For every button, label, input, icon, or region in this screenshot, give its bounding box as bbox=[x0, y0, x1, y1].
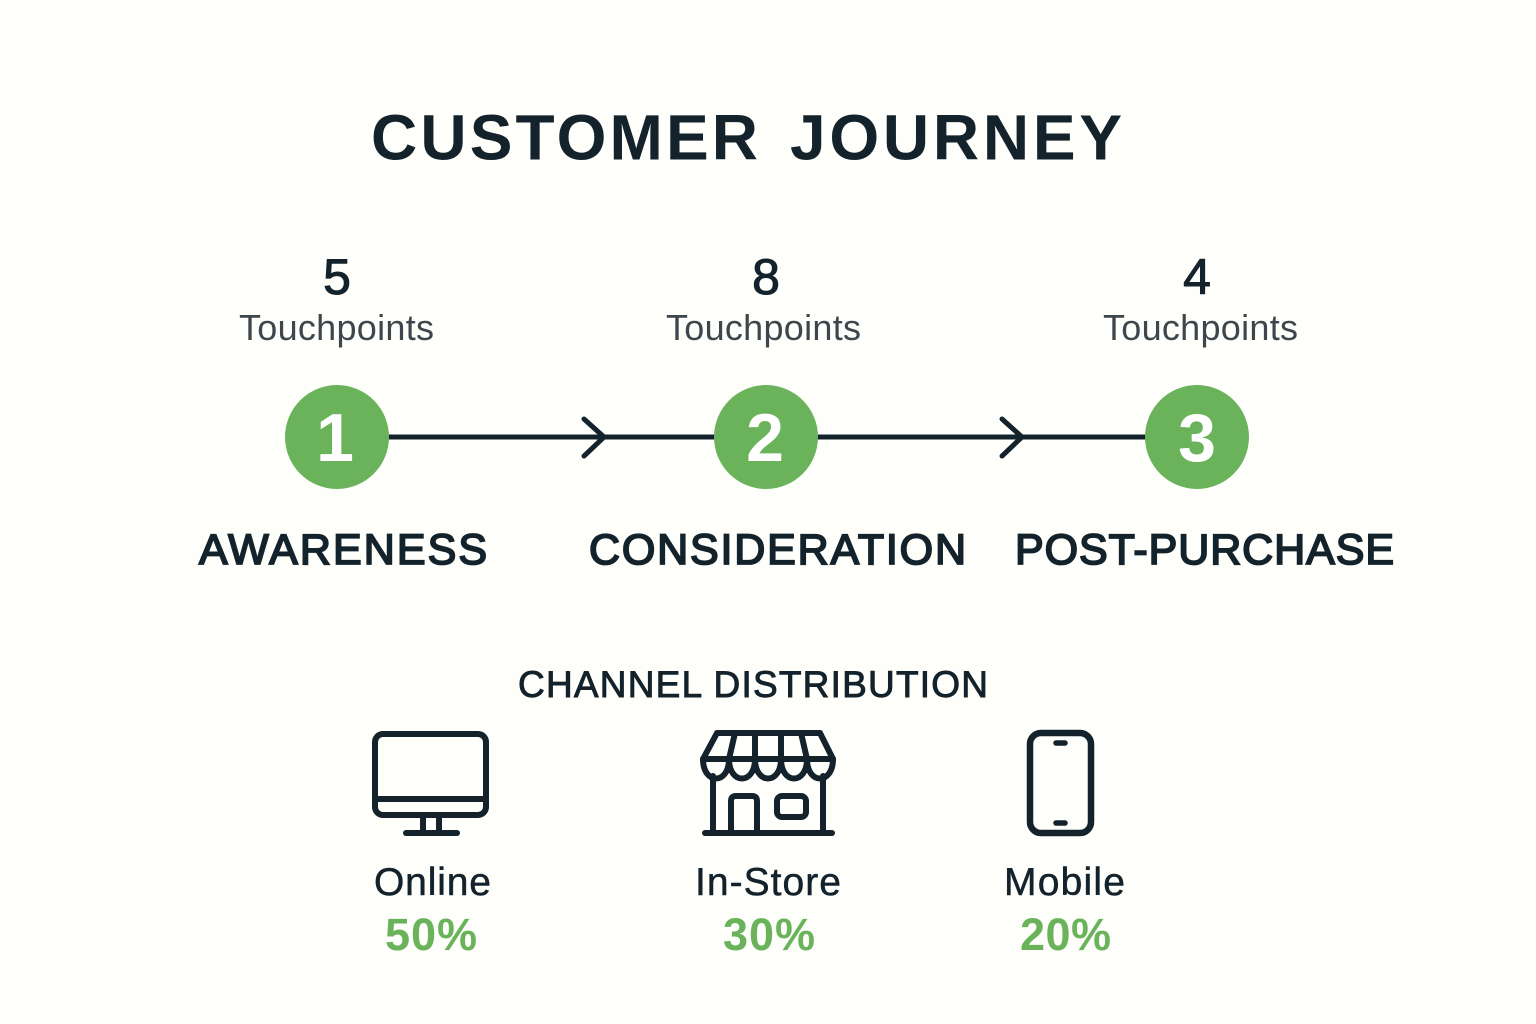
channel percentage: 50% bbox=[385, 909, 477, 960]
stage 2: consideration bbox=[589, 249, 966, 574]
step badge 3: 3 bbox=[1178, 400, 1216, 476]
icon: desktop monitor bbox=[375, 734, 486, 833]
step badge 3 bbox=[1145, 385, 1249, 489]
stage 1: awareness bbox=[199, 249, 487, 574]
touchpoints label: Touchpoints bbox=[239, 307, 434, 348]
touchpoints label: Touchpoints bbox=[1103, 307, 1298, 348]
touchpoints label: Touchpoints bbox=[666, 307, 861, 348]
channel: mobile bbox=[1004, 733, 1125, 960]
channel distribution heading: CHANNEL DISTRIBUTION bbox=[518, 664, 988, 705]
title: JOURNEY bbox=[790, 102, 1122, 174]
channel label: Online bbox=[374, 861, 491, 904]
icon: storefront bbox=[703, 733, 833, 833]
stage 3: post-purchase bbox=[1015, 249, 1394, 574]
channel label: In-Store bbox=[695, 861, 841, 904]
title: CUSTOMER bbox=[371, 102, 758, 174]
channel: in-store bbox=[695, 733, 841, 960]
channel percentage: 30% bbox=[723, 909, 815, 960]
step badge 2 bbox=[714, 385, 818, 489]
step badge 1 bbox=[285, 385, 389, 489]
step badge 1: 1 bbox=[316, 400, 354, 476]
step badge 2: 2 bbox=[746, 400, 784, 476]
stage name: POST-PURCHASE bbox=[1015, 526, 1394, 574]
touchpoint count 5: 5 bbox=[323, 249, 351, 305]
icon: smartphone bbox=[1030, 733, 1091, 833]
touchpoint count 8: 8 bbox=[752, 249, 780, 305]
connector arrow 2 bbox=[817, 419, 1147, 456]
title bbox=[371, 102, 1122, 174]
channel percentage: 20% bbox=[1020, 909, 1111, 960]
stage name: AWARENESS bbox=[199, 526, 487, 574]
touchpoint count 4: 4 bbox=[1183, 249, 1211, 305]
channel label: Mobile bbox=[1004, 861, 1125, 904]
stage name: CONSIDERATION bbox=[589, 526, 966, 574]
journey timeline bbox=[199, 249, 1394, 574]
channel: online bbox=[374, 734, 491, 960]
connector arrow 1 bbox=[388, 419, 715, 456]
